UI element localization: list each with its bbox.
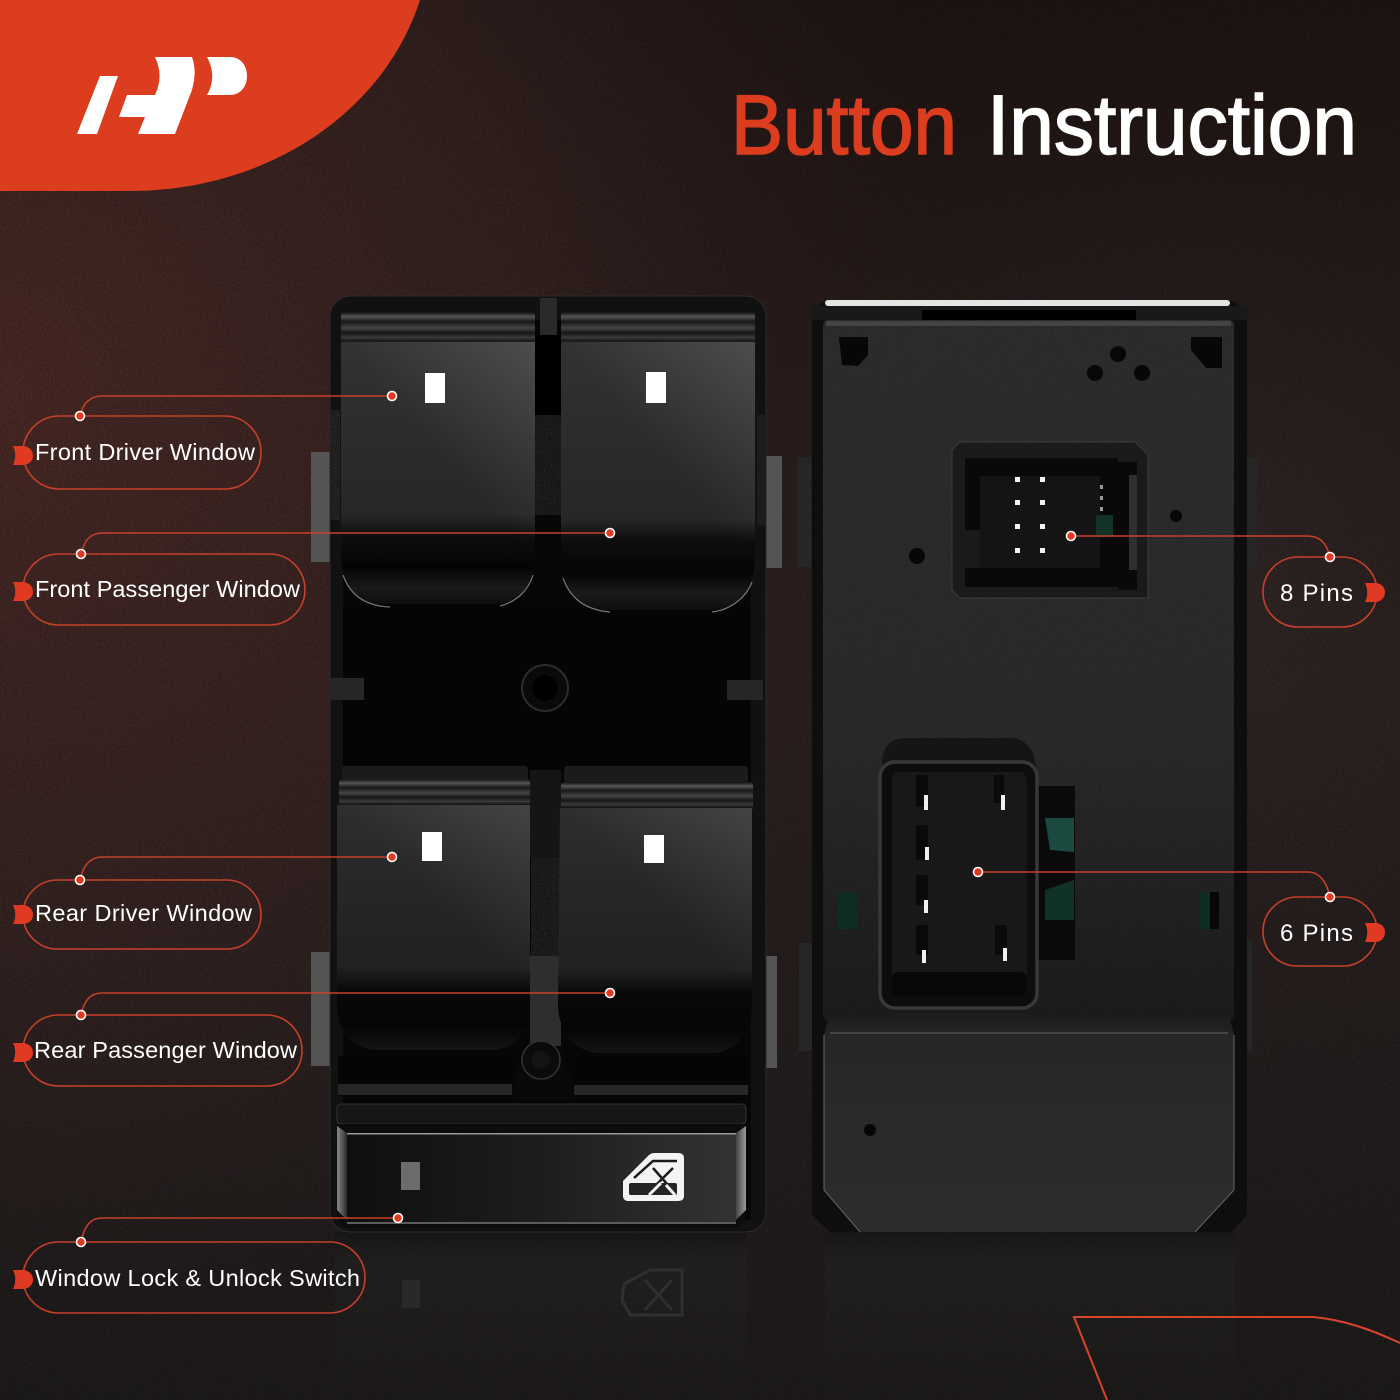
connector: 8 pins [952,442,1148,598]
bottom right accent line [1074,1317,1400,1400]
callout: 6 pins [974,868,1385,966]
callout: rear passenger window [13,988,614,1086]
callout: rear passenger window: Rear Passenger Window [34,1037,298,1063]
callout: 8 pins [1066,532,1385,627]
callout: rear driver window [13,852,396,949]
callout: front driver window: Front Driver Window [35,439,256,465]
green inspection windows [838,892,1219,929]
product: front of window switch [311,296,782,1232]
logo badge [0,0,420,191]
center column top [535,298,561,515]
product: back of window switch [797,300,1257,1232]
mounting clips and screw hole [330,665,763,711]
callout: 6 pins: 6 Pins [1280,920,1353,947]
title: Button [731,78,957,172]
rear plate [823,320,1234,1020]
plate holes [839,337,1222,564]
side clips [797,457,1257,1052]
connector: 6 pins [880,738,1075,1008]
button: rear driver window [337,766,530,1050]
rear trays and lower screw [338,1041,748,1100]
button: window lock and unlock switch [336,1104,746,1228]
callout: window lock and unlock switch: Window Lock & Unlock Switch [35,1265,360,1291]
icon: brand logo [77,57,247,134]
rear cover [824,1012,1234,1232]
title: Instruction [987,78,1357,172]
switch body [330,296,766,1232]
title [731,78,1357,172]
side texture strips [330,410,766,525]
button: front passenger window [561,312,755,612]
callout: front driver window [13,392,396,489]
button: rear passenger window [558,766,753,1053]
icon: window lock [623,1153,684,1201]
floor reflection [335,1232,1235,1400]
side clips [311,452,782,1068]
center column bottom [530,770,561,1046]
callout: front passenger window [13,528,614,625]
button: front driver window [341,312,535,607]
callout: rear driver window: Rear Driver Window [35,900,253,926]
rear housing [812,300,1247,1232]
callout: front passenger window: Front Passenger Window [35,576,301,602]
callout: 8 pins: 8 Pins [1280,580,1353,607]
callout: window lock and unlock switch [13,1214,402,1313]
